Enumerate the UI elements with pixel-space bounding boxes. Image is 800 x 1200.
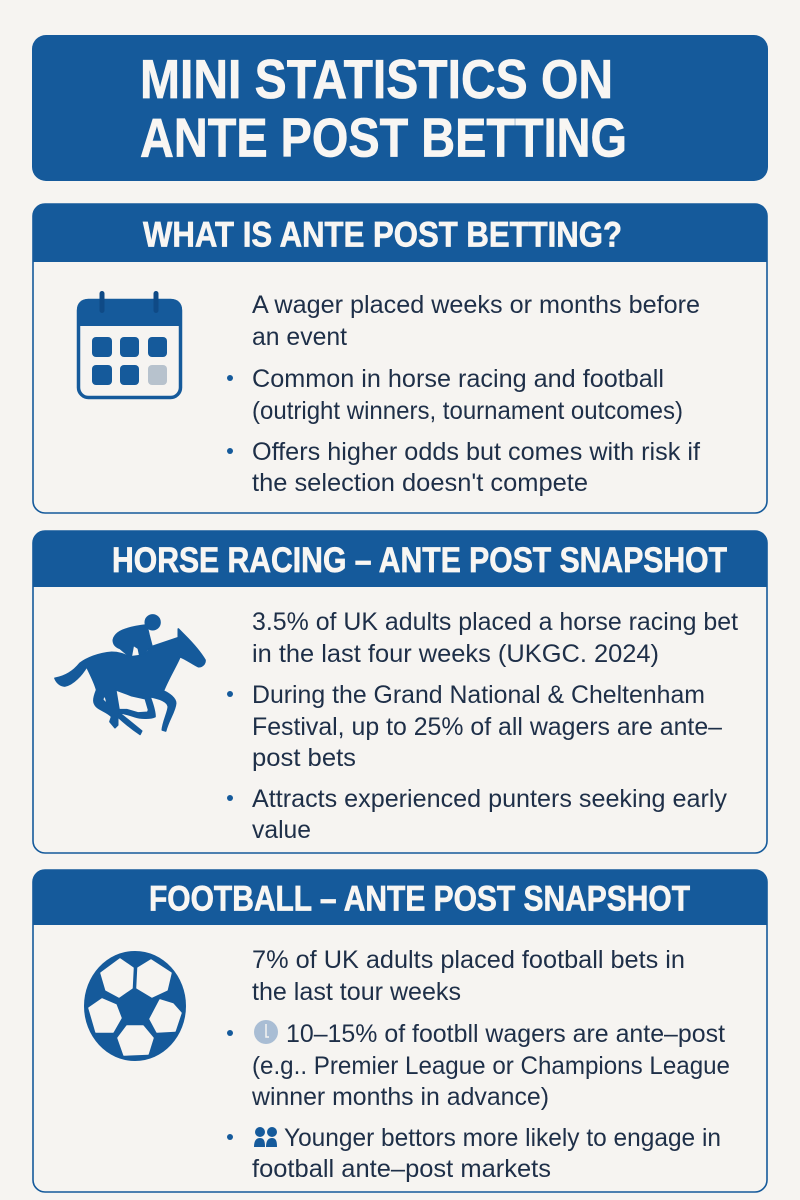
icon: football: [84, 951, 186, 1061]
text block: participation statistic: [252, 608, 738, 668]
bullet: younger bettors: Younger bettors more likely to engage in: [284, 1124, 721, 1152]
text block: definition: A wager placed weeks or months before: [252, 291, 700, 319]
bullet: share of wagers: 10–15% of footbll wagers are ante–post: [286, 1020, 725, 1048]
bullet list: what is ante post betting: (outright winners, tournament outcomes): [252, 397, 683, 425]
icon: calendar: [77, 291, 182, 398]
text block: football participation: 7% of UK adults placed football bets in: [252, 946, 685, 974]
bullet list: horse racing: post bets: [252, 744, 356, 772]
text block: football participation: the last tour weeks: [252, 978, 461, 1006]
heading: what is ante post betting: WHAT IS ANTE POST BETTING?: [143, 216, 622, 254]
bullet list: what is ante post betting: the selection doesn't compete: [252, 469, 588, 497]
panel: horse racing snapshot: [33, 531, 767, 853]
bullet: share of wagers: winner months in advance): [251, 1083, 549, 1111]
bullet: share of wagers: [227, 1020, 730, 1111]
heading: football snapshot: FOOTBALL – ANTE POST SNAPSHOT: [149, 880, 690, 918]
icon: clock: [254, 1020, 278, 1044]
bullet list: horse racing: Festival, up to 25% of all wagers are ante–: [252, 713, 722, 741]
bullet list: what is ante post betting: Common in horse racing and football: [252, 365, 664, 393]
icon: people: [254, 1127, 277, 1147]
title banner: [32, 35, 768, 181]
panel: what is ante post betting: [33, 204, 767, 513]
panel: football snapshot: [33, 870, 767, 1192]
bullet: younger bettors: football ante–post markets: [252, 1155, 551, 1183]
bullet list: horse racing: [227, 681, 727, 844]
bullet list: what is ante post betting: Offers higher odds but comes with risk if: [252, 438, 700, 466]
text block: definition: [252, 291, 700, 351]
bullet list: horse racing: During the Grand National & Cheltenham: [252, 681, 705, 709]
bullet: younger bettors: [227, 1124, 721, 1183]
title banner: ANTE POST BETTING: [140, 106, 627, 168]
bullet list: what is ante post betting: [227, 365, 700, 497]
title banner: MINI STATISTICS ON: [140, 48, 613, 110]
text block: participation statistic: 3.5% of UK adults placed a horse racing bet: [252, 608, 738, 636]
text block: football participation: [252, 946, 685, 1006]
text block: participation statistic: in the last four weeks (UKGC. 2024): [252, 640, 659, 668]
bullet: share of wagers: (e.g.. Premier League or Champions League: [252, 1052, 730, 1080]
icon: horse and jockey: [55, 615, 205, 734]
bullet list: horse racing: Attracts experienced punters seeking early: [252, 785, 727, 813]
bullet list: horse racing: value: [252, 816, 311, 844]
text block: definition: an event: [252, 323, 347, 351]
